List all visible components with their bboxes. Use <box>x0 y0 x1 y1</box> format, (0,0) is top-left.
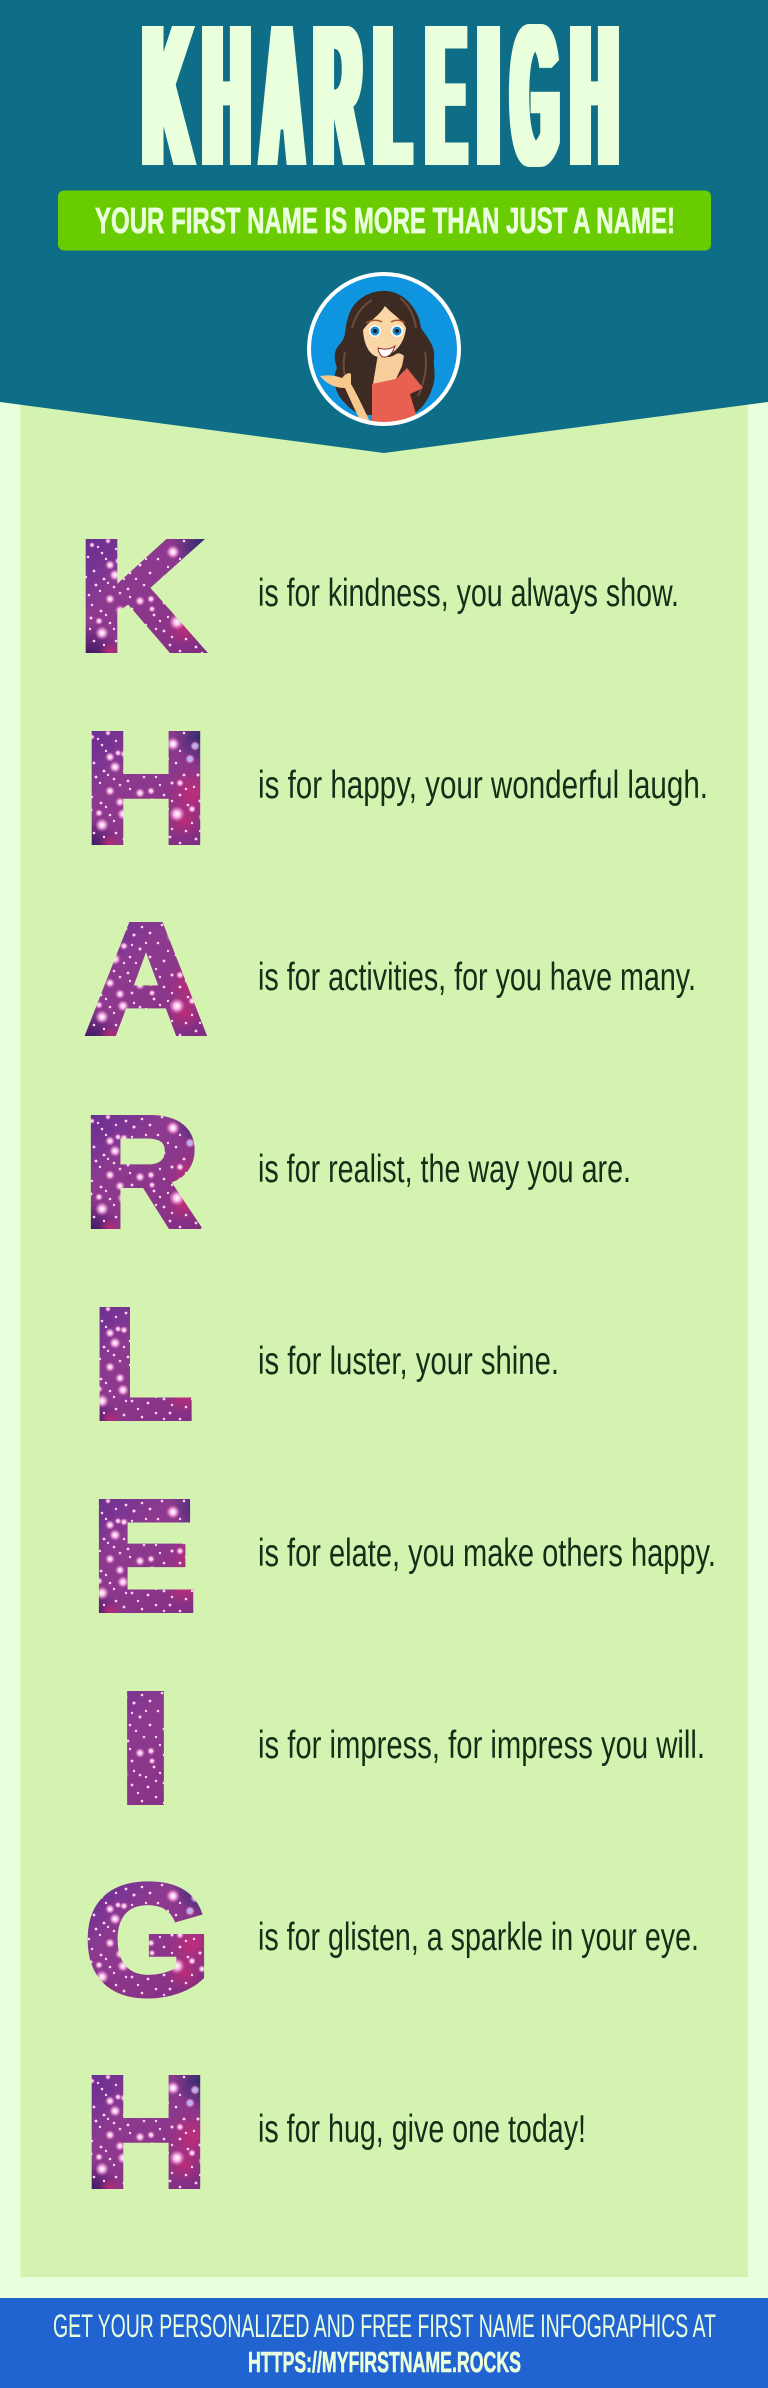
letter K row <box>77 509 679 684</box>
letter I: I <box>118 1661 174 1836</box>
letter I row <box>118 1661 705 1836</box>
letter E row <box>91 1469 716 1644</box>
line L: is for luster, your shine. <box>258 1340 559 1383</box>
letter H2 row <box>83 2045 586 2220</box>
letter H row <box>83 701 708 876</box>
icon: woman avatar <box>309 274 459 424</box>
letter L row <box>92 1277 559 1452</box>
panel: letters <box>20 380 748 2277</box>
letter A row <box>85 892 696 1067</box>
letter G: G <box>84 1853 211 2028</box>
letter R row <box>83 1085 631 1260</box>
line R: is for realist, the way you are. <box>258 1148 631 1191</box>
letter G row <box>84 1853 699 2028</box>
footer url: HTTPS://MYFIRSTNAME.ROCKS <box>248 2347 521 2379</box>
footer <box>0 2298 768 2388</box>
letter H: H <box>83 701 209 876</box>
letter L: L <box>92 1277 194 1452</box>
letter E: E <box>91 1469 196 1644</box>
tagline banner <box>58 190 711 250</box>
letter K: K <box>77 509 203 684</box>
header banner <box>0 0 768 453</box>
letter H second: H <box>83 2045 209 2220</box>
letter A: A <box>85 892 207 1067</box>
letter R: R <box>83 1085 200 1260</box>
line H second: is for hug, give one today! <box>258 2108 586 2151</box>
